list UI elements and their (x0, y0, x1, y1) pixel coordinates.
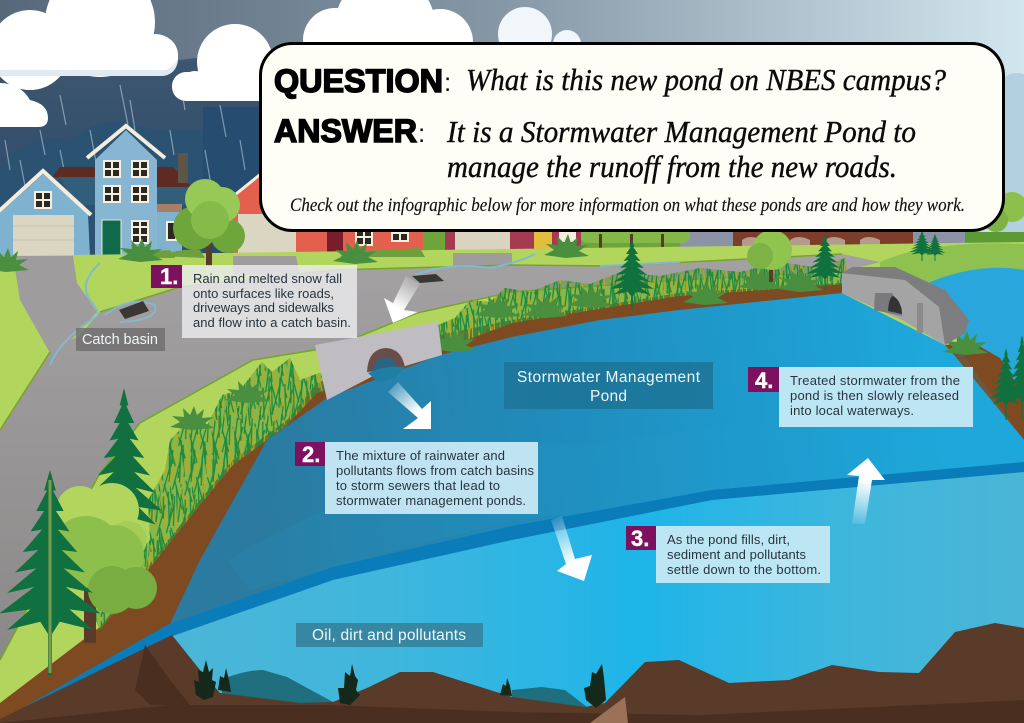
chimney (178, 153, 188, 183)
house: roof back (52, 167, 192, 187)
bank fir front (0, 470, 101, 675)
caption 2 number badge (295, 442, 325, 466)
caption 2 text: pollutants flows from catch basins (336, 463, 534, 478)
question and answer panel: : (418, 118, 425, 148)
caption 3 text panel (656, 526, 830, 583)
label: stormwater management pond: Pond (590, 388, 627, 405)
caption 2 text panel (325, 442, 538, 514)
cloud: right (498, 7, 581, 61)
brown bank (0, 283, 842, 723)
culvert under road (315, 322, 442, 400)
catch basins (119, 274, 444, 319)
caption 2 number: 2. (302, 442, 320, 467)
label: stormwater management pond (504, 362, 713, 409)
question and answer panel: : (444, 67, 451, 97)
caption 1 number: 1. (160, 264, 178, 289)
caption 3 text: As the pond fills, dirt, (667, 532, 790, 547)
ferns (0, 234, 988, 430)
tree by bridge (747, 230, 792, 282)
label: catch basin: Catch basin (82, 332, 158, 348)
answer text: It is a Stormwater Management Pond to (446, 114, 916, 149)
streams (50, 254, 680, 365)
reeds left bank (92, 358, 326, 630)
question heading: QUESTION (274, 63, 443, 99)
cloud: top left (0, 0, 178, 90)
house: tall blue (87, 126, 165, 257)
house: right extension (156, 205, 182, 257)
house: left blue (0, 171, 91, 257)
arrow 4 (847, 458, 885, 524)
distant pale hill (1000, 73, 1024, 240)
arch bridge (842, 267, 969, 345)
caption 1 text panel (182, 265, 357, 338)
caption 4 text: pond is then slowly released (790, 388, 959, 403)
lawn (0, 242, 1024, 723)
caption 2 (295, 442, 538, 514)
right shore (930, 268, 1024, 445)
caption 3 number: 3. (631, 526, 649, 551)
house: red (231, 173, 423, 257)
arrow 1 (384, 276, 420, 323)
teal mounds (220, 670, 587, 714)
label: stormwater management pond: Stormwater Management (517, 369, 701, 386)
caption 2 text: stormwater management ponds. (336, 493, 526, 508)
note text: Check out the infographic below for more information on what these ponds are and how they work. (290, 196, 965, 216)
caption 3 text: sediment and pollutants (667, 547, 806, 562)
caption 1 text: onto surfaces like roads, (193, 286, 334, 301)
far trees and buildings (423, 192, 1024, 257)
label: oil, dirt and pollutants (296, 623, 483, 647)
label: catch basin (76, 328, 165, 351)
caption 4 text panel (779, 367, 973, 427)
caption 3 text: settle down to the bottom. (667, 562, 821, 577)
caption 4 text: Treated stormwater from the (790, 373, 960, 388)
sky background (0, 0, 1024, 300)
caption 4 number badge (748, 367, 779, 392)
road (0, 254, 880, 660)
answer heading: ANSWER (274, 113, 417, 149)
far hill lawn (880, 243, 1024, 290)
pond water below surface (0, 472, 1024, 723)
storm clouds (0, 50, 270, 270)
arrow 2 (388, 382, 431, 429)
driveways (13, 253, 512, 353)
reeds far bank (438, 258, 848, 350)
answer text: manage the runoff from the new roads. (447, 149, 897, 184)
tree near houses (173, 179, 245, 266)
bottom soil (0, 623, 1024, 723)
caption 4 text: into local waterways. (790, 403, 914, 418)
water surface line (0, 462, 1024, 723)
caption 1 number badge (151, 265, 182, 288)
bush tree (50, 483, 157, 643)
rain (5, 80, 255, 238)
caption 1 text: Rain and melted snow fall (193, 271, 342, 286)
houses (0, 126, 581, 257)
arrow 3 (551, 516, 592, 581)
caption 3 (626, 526, 830, 583)
question and answer panel (260, 44, 1004, 230)
clouds (0, 0, 581, 127)
label: oil, dirt and pollutants: Oil, dirt and pollutants (312, 627, 466, 644)
caption 2 text: to storm sewers that lead to (336, 478, 500, 493)
caption 3 number badge (626, 526, 656, 550)
caption 1 text: and flow into a catch basin. (193, 315, 351, 330)
bank fir back (86, 388, 162, 563)
cloud: centre (172, 0, 473, 101)
far firs (610, 231, 1024, 420)
caption 2 text: The mixture of rainwater and (336, 448, 505, 463)
seaweed (194, 660, 606, 708)
question text: What is this new pond on NBES campus? (466, 62, 946, 97)
cloud: small left (0, 83, 48, 127)
caption 1 text: driveways and sidewalks (193, 300, 334, 315)
caption 4 (748, 367, 973, 427)
house: maroon (445, 228, 581, 253)
caption 4 number: 4. (755, 368, 773, 393)
caption 1 (151, 264, 357, 338)
lighter water shading (228, 350, 1024, 590)
panel background (260, 44, 1004, 230)
hedges (140, 248, 425, 258)
pond water above surface (168, 293, 1024, 640)
